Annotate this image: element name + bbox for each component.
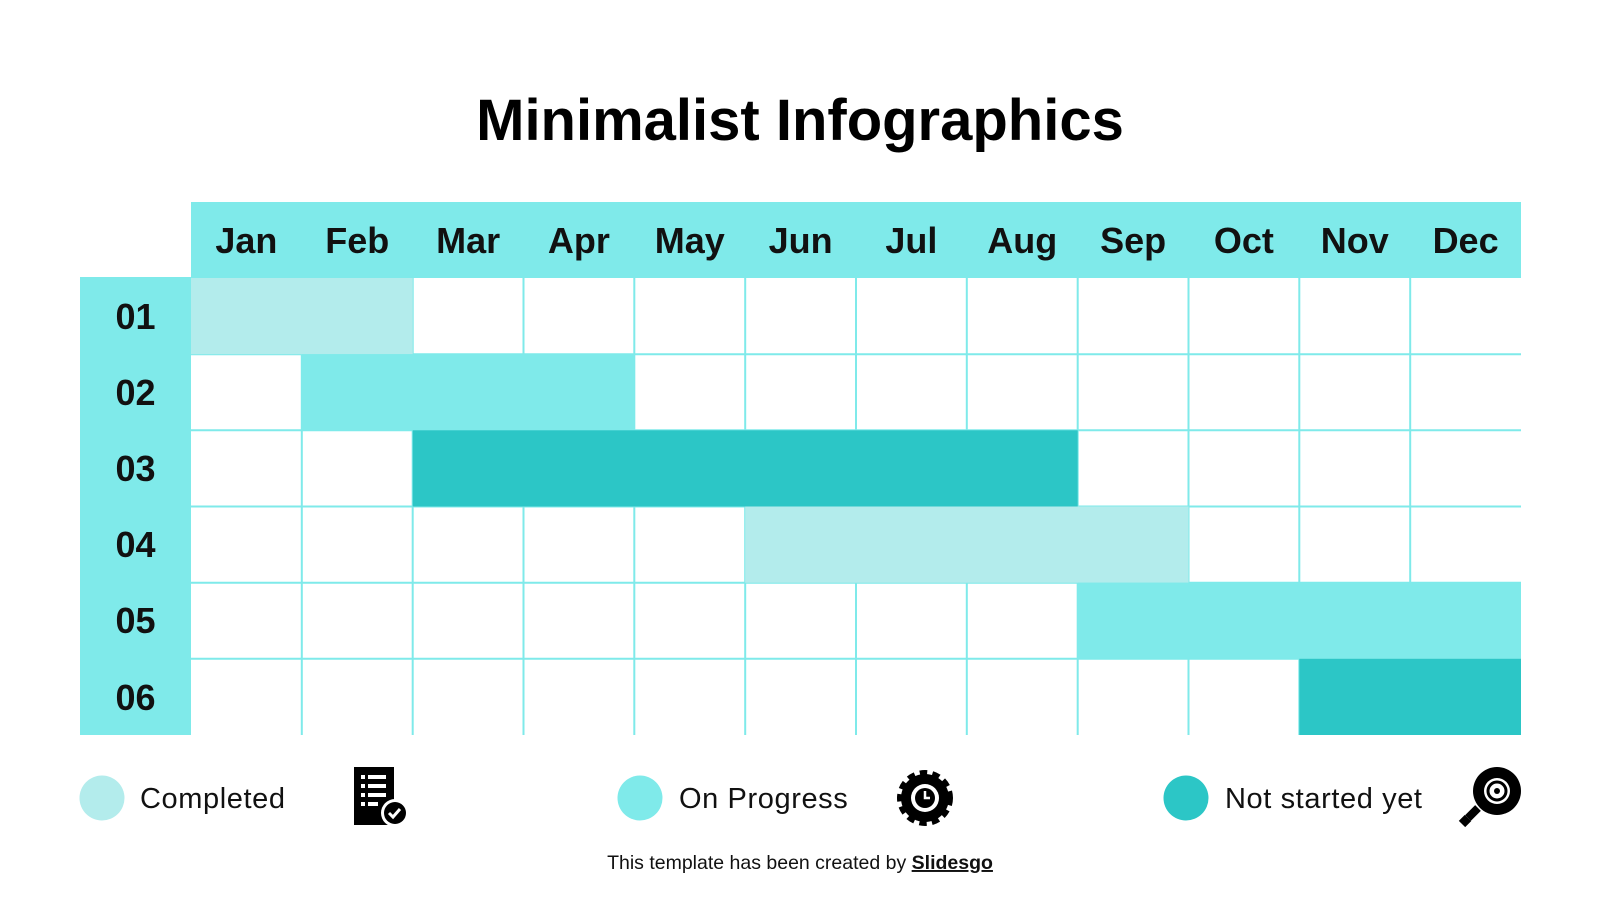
header: months: Feb	[325, 220, 389, 261]
row labels: 01	[115, 296, 156, 337]
header: months: Sep	[1100, 220, 1166, 261]
icon: document check	[354, 767, 409, 827]
header: months: Jul	[885, 220, 937, 261]
header: months: Jan	[215, 220, 277, 261]
row labels: 05	[115, 600, 156, 641]
icon: magnifier target	[1462, 767, 1521, 824]
footer credit: This template has been created by Slidesgo	[607, 852, 993, 874]
icon: gear clock	[901, 774, 949, 822]
header: months: Jun	[769, 220, 833, 261]
title: Minimalist Infographics	[476, 88, 1124, 153]
header: months: Dec	[1433, 220, 1499, 261]
row labels: 06	[115, 677, 156, 718]
header: months: Apr	[548, 220, 610, 261]
header: months: Aug	[987, 220, 1057, 261]
legend: on progress: On Progress	[679, 783, 848, 815]
header: months: Mar	[436, 220, 500, 261]
legend: on progress	[618, 776, 848, 820]
legend: completed: Completed	[140, 783, 286, 815]
legend: not started yet	[1164, 776, 1423, 820]
row labels: 03	[115, 448, 156, 489]
row labels: 04	[115, 524, 156, 565]
header: months: Oct	[1214, 220, 1274, 261]
row labels: 02	[115, 372, 156, 413]
gantt chart	[80, 202, 1521, 735]
header: months: May	[655, 220, 725, 261]
bars	[191, 278, 1521, 735]
header: months: Nov	[1321, 220, 1389, 261]
legend: completed	[80, 776, 286, 820]
header: months	[191, 202, 1521, 278]
row labels	[80, 277, 191, 735]
legend: not started yet: Not started yet	[1225, 783, 1423, 815]
